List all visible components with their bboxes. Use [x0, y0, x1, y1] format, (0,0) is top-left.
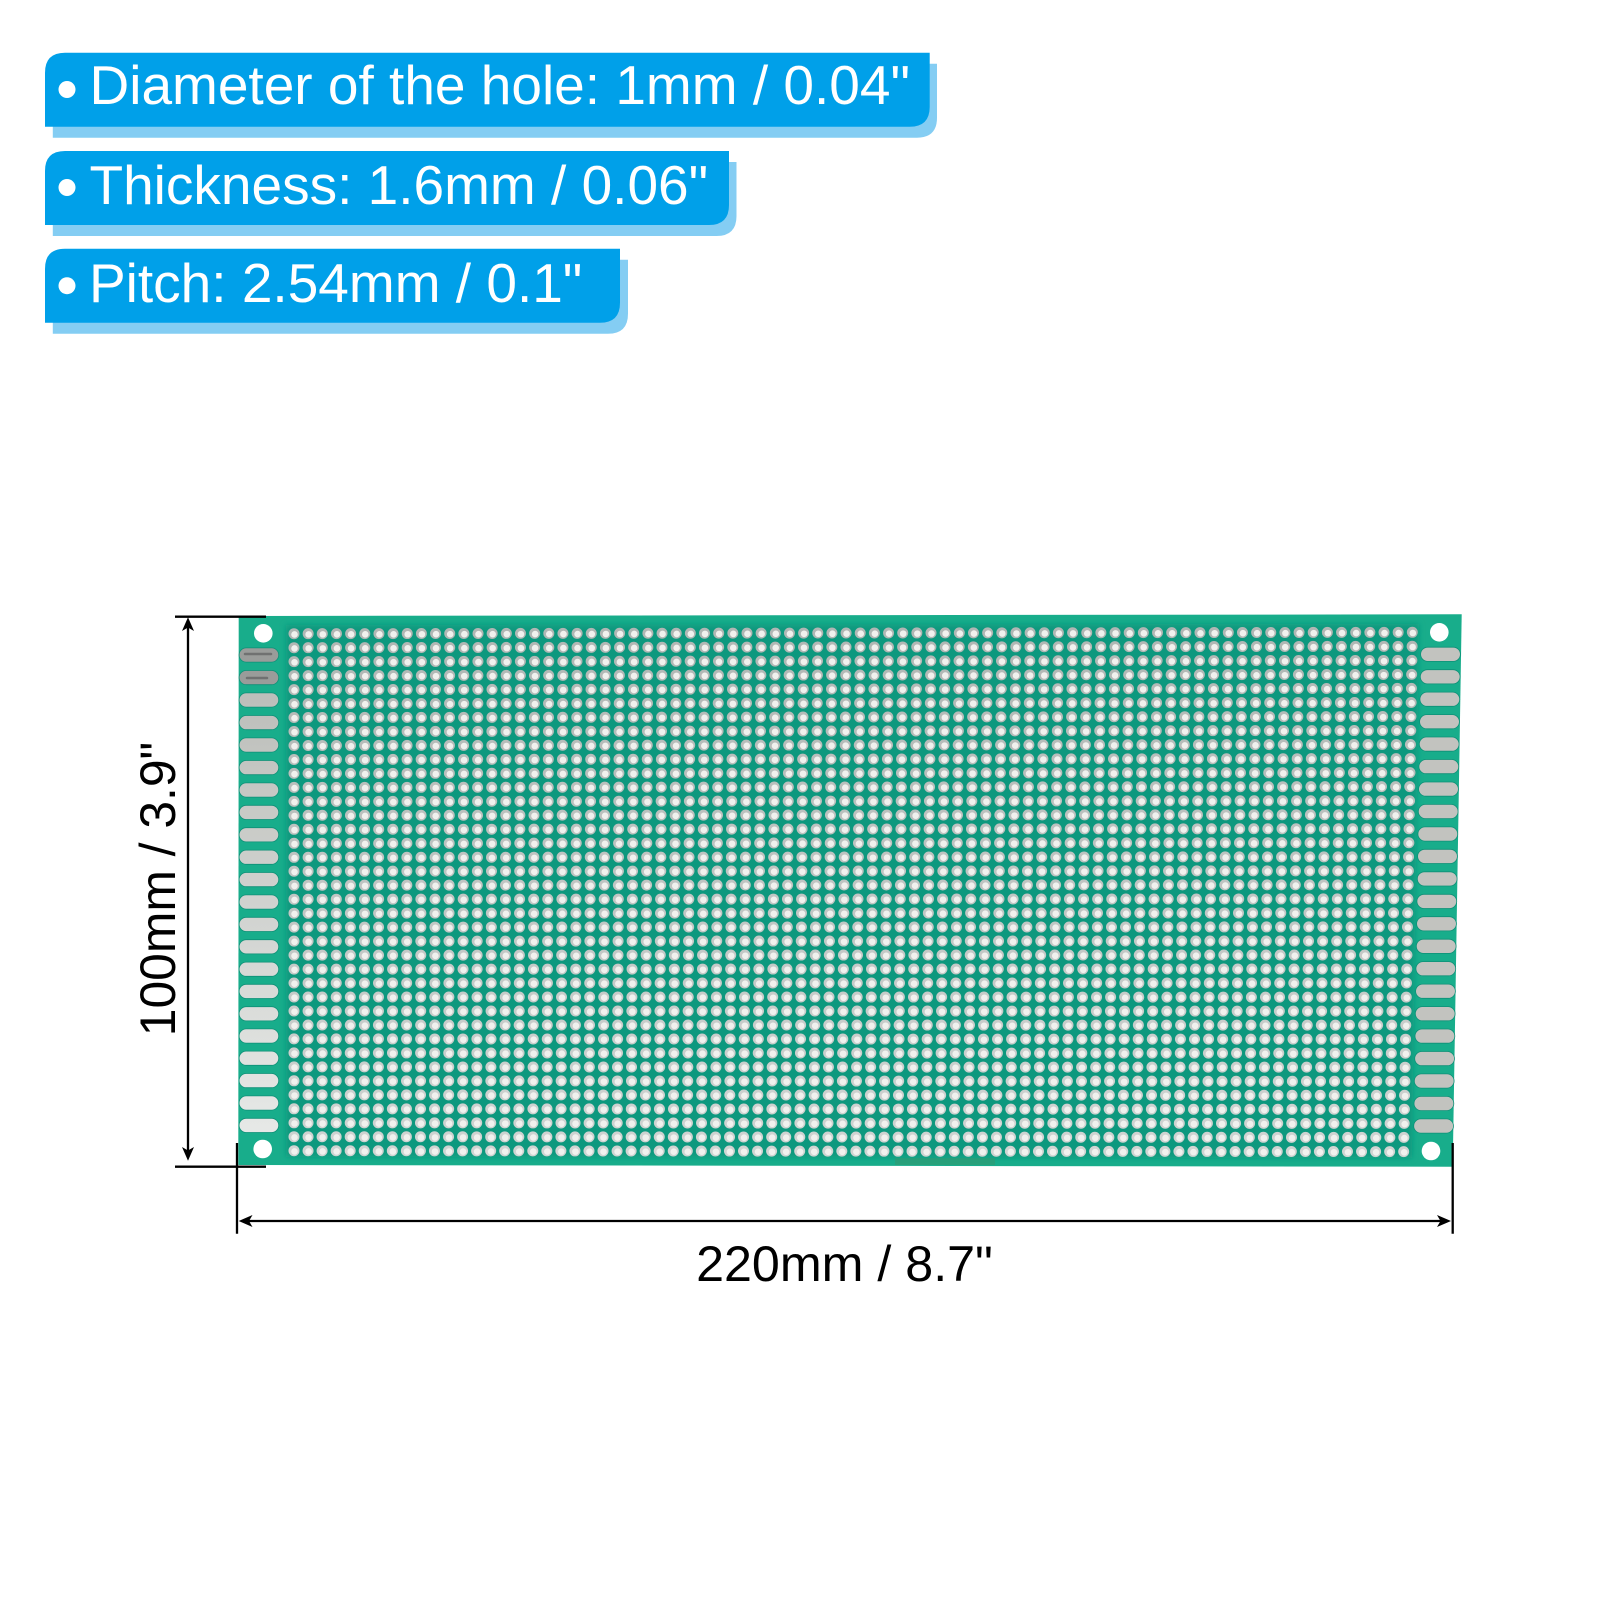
dimension: height [130, 617, 266, 1167]
inner dot field [286, 624, 1419, 1158]
callout: thickness: Thickness: 1.6mm / 0.06" [90, 154, 708, 216]
left edge pads [245, 654, 272, 1125]
bottom smudge [895, 1158, 995, 1165]
callout: diameter of the hole: Diameter of the hole: 1mm / 0.04" [90, 54, 910, 116]
circuit board [238, 614, 1462, 1167]
dimension: width [237, 1143, 1453, 1292]
mounting holes [253, 623, 1449, 1160]
callout: thickness [45, 151, 736, 236]
board substrate [238, 614, 1462, 1167]
dimension: width: 220mm / 8.7" [696, 1236, 993, 1292]
callout: pitch [45, 249, 628, 334]
through-hole dot grid [294, 632, 1420, 1152]
callout: diameter of the hole [45, 53, 937, 138]
callout: pitch: Pitch: 2.54mm / 0.1" [89, 252, 582, 314]
right edge pads [1421, 654, 1453, 1126]
dimension: height: 100mm / 3.9" [130, 742, 186, 1036]
